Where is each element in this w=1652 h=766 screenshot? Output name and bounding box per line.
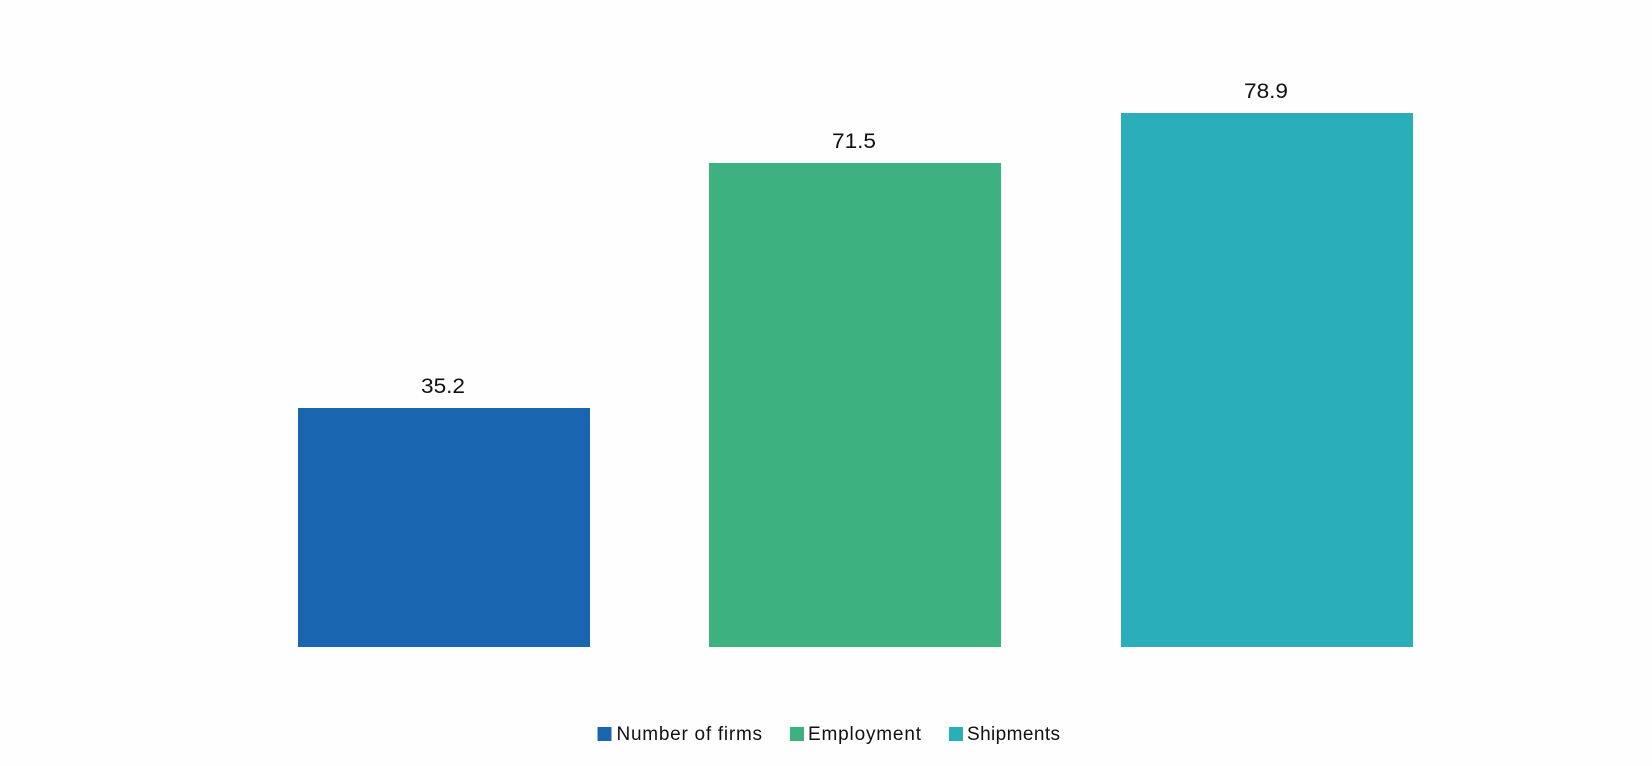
bar: shipments: 78.9	[1244, 80, 1288, 103]
bar: employment: 71.5	[832, 130, 876, 153]
bar: number of firms	[298, 375, 590, 647]
legend item: employment: Employment	[808, 724, 922, 745]
legend item: number of firms: Number of firms	[616, 724, 762, 745]
legend	[598, 724, 1060, 745]
bar: number of firms: 35.2	[421, 375, 465, 398]
bar: employment	[709, 130, 1001, 647]
bar: shipments	[1121, 80, 1413, 647]
legend item: shipments: Shipments	[967, 724, 1060, 745]
